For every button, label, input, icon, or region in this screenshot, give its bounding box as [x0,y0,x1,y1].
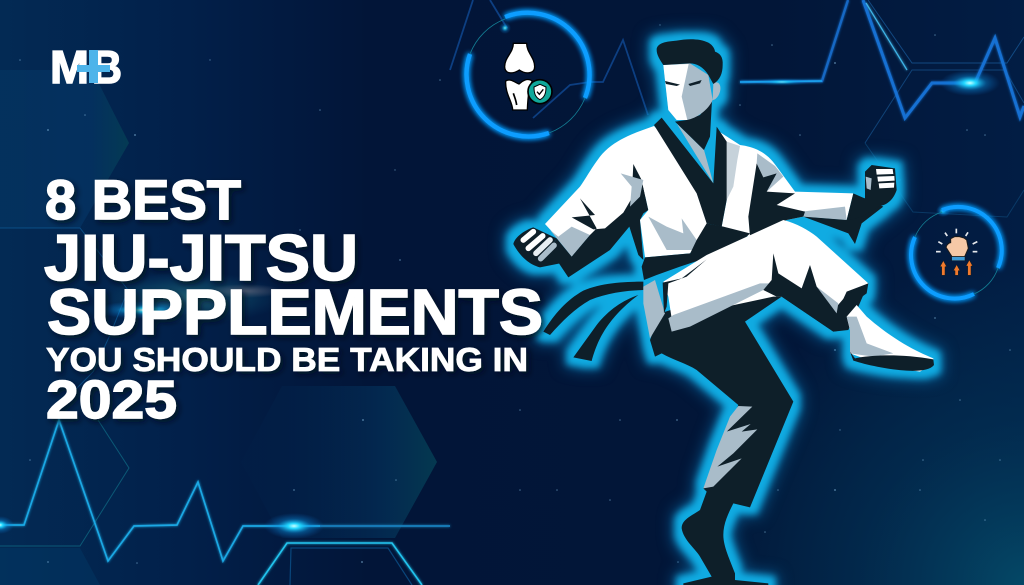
logo: B [92,41,122,93]
neck [675,100,712,150]
ear [713,82,720,100]
inner shirt [677,123,713,183]
face [663,63,713,120]
strength ring [911,207,1002,299]
title: 8 BEST [45,168,241,231]
thigh shading [668,283,777,332]
icon: raised fist with arrows [936,229,977,275]
heartbeat line: behind joint ring [450,0,648,118]
eyebrows [665,80,702,86]
belt tails [543,282,643,361]
logo [50,41,122,93]
torso shading [648,217,697,250]
trousers and standing leg [650,280,868,585]
joint health ring [467,13,590,136]
title: SUPPLEMENTS [47,276,543,348]
left sleeve shading [550,227,590,257]
raised foot [847,305,933,372]
jiu-jitsu fighter figure [513,39,934,585]
left sleeve [545,126,654,257]
torso [640,126,713,257]
title [44,168,543,430]
collar [654,118,727,227]
left fist [513,227,560,267]
belt [642,253,705,280]
heartbeat line: bottom left [0,420,450,585]
raised thigh [663,220,868,318]
hip shading [643,280,665,338]
hair [657,39,723,84]
trouser highlight [703,406,757,488]
thigh dark folds [763,253,868,332]
title: 2025 [46,370,177,430]
heartbeat line: top right [740,0,1024,118]
right forearm [748,163,883,244]
foot sole [850,352,934,371]
icon: knee joint with shield [505,43,552,110]
right torso and sleeve [717,130,853,237]
title: YOU SHOULD BE TAKING IN [46,342,528,379]
logo: M [50,41,89,93]
left forearm [550,164,648,277]
title: JIU-JITSU [44,221,358,294]
right hand [850,165,897,220]
